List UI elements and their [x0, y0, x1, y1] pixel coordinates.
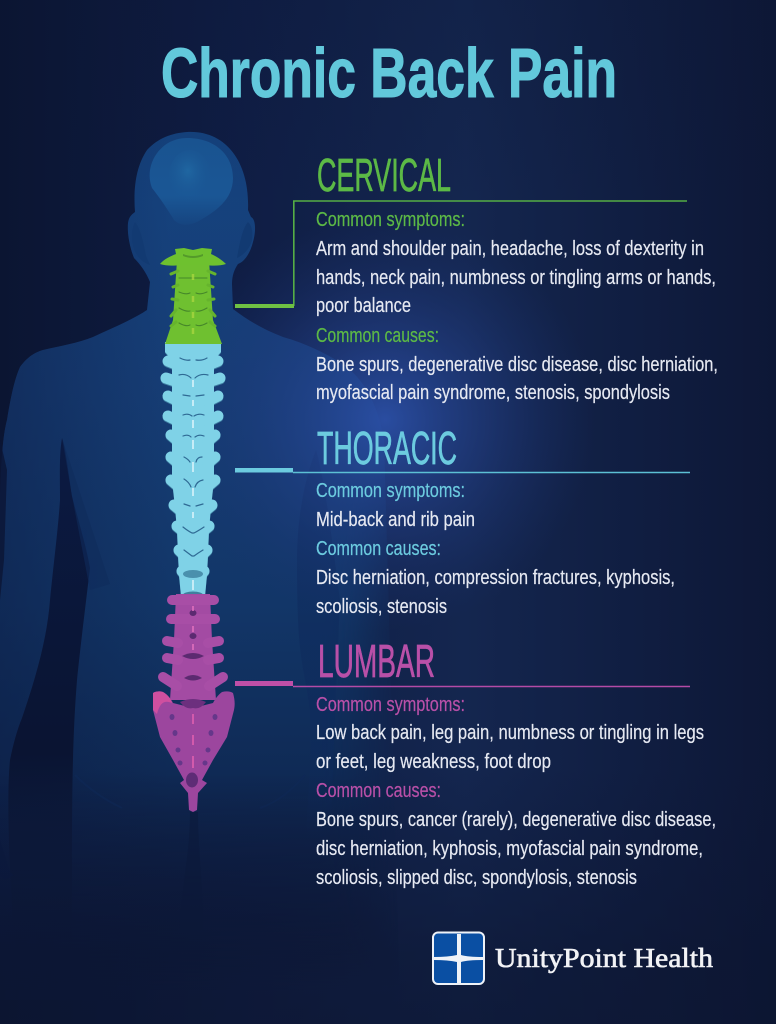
human back silhouette: [0, 132, 385, 888]
lumbar causes text: disc herniation, kyphosis, myofascial pain syndrome,: [316, 838, 703, 860]
cervical symptoms text: Arm and shoulder pain, headache, loss of dexterity in: [316, 238, 704, 260]
left arm fold shadow: [62, 438, 110, 590]
lumbar connector: [293, 686, 690, 688]
section: lumbar: [235, 635, 716, 889]
thoracic causes label: Common causes:: [316, 538, 441, 560]
cervical connector bar: [235, 304, 294, 308]
left edge shadow: [0, 440, 7, 600]
thoracic surface details: [179, 358, 208, 598]
thoracic vertebrae: [165, 342, 221, 596]
logo wordmark: UnityPoint Health: [495, 943, 714, 973]
section: cervical: [235, 149, 718, 404]
title: Chronic Back Pain: [161, 34, 617, 112]
thoracic heading: THORACIC: [317, 422, 457, 474]
thoracic symptoms text: Mid-back and rib pain: [316, 509, 475, 531]
cervical vertebrae: [160, 248, 226, 344]
section: thoracic: [235, 422, 690, 618]
cervical heading: CERVICAL: [317, 149, 451, 201]
lumbar symptoms text: [316, 722, 704, 773]
thoracic connector: [293, 472, 690, 474]
cervical symptoms text: poor balance: [316, 295, 411, 317]
cervical causes text: [316, 354, 718, 404]
cervical causes text: myofascial pain syndrome, stenosis, spondylosis: [316, 382, 670, 404]
cervical connector: [294, 201, 687, 306]
lumbar causes text: [316, 809, 716, 889]
cervical causes label: Common causes:: [316, 325, 439, 347]
right ear inner: [237, 222, 252, 258]
thoracic causes text: [316, 567, 675, 618]
cervical symptoms text: [316, 238, 716, 317]
thoracic causes text: scoliosis, stenosis: [316, 596, 447, 618]
lumbar symptoms text: or feet, leg weakness, foot drop: [316, 751, 551, 773]
hip folds: [75, 775, 305, 808]
logo: [433, 932, 714, 984]
lumbar causes label: Common causes:: [316, 780, 441, 802]
cervical symptoms label: Common symptoms:: [316, 209, 465, 231]
logo icon: cross: [433, 932, 484, 984]
head highlight: [150, 138, 233, 225]
lumbar heading: LUMBAR: [318, 635, 435, 687]
left arm gap shadow: [8, 438, 90, 960]
head core highlight: [169, 150, 211, 202]
right arm gap shadow: [297, 450, 340, 840]
left ear inner: [132, 222, 150, 265]
lumbar symptoms label: Common symptoms:: [316, 694, 465, 716]
lumbar connector bar: [235, 681, 293, 686]
thoracic symptoms label: Common symptoms:: [316, 480, 465, 502]
lumbar vertebrae: [163, 594, 223, 700]
lumbar causes text: scoliosis, slipped disc, spondylosis, stenosis: [316, 867, 637, 889]
sacrum and coccyx: [153, 691, 235, 812]
spine: [153, 248, 235, 812]
thoracic causes text: Disc herniation, compression fractures, kyphosis,: [316, 567, 675, 589]
thoracic connector bar: [235, 468, 293, 472]
lower back centre crease: [179, 812, 203, 930]
lumbar symptoms text: Low back pain, leg pain, numbness or tingling in legs: [316, 722, 704, 744]
left lower arm shadow: [0, 840, 14, 880]
